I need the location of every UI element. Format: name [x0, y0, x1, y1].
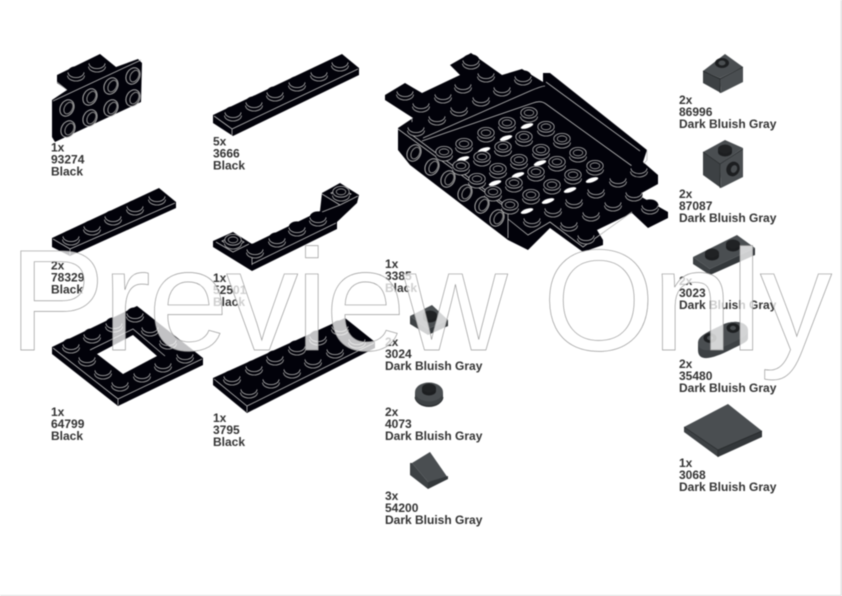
label: 3385: Black [385, 281, 417, 295]
label: 78329: 2x [51, 258, 65, 272]
part: 87087 side stud brick [679, 140, 777, 225]
label: 3024: 2x [385, 335, 399, 349]
label: 3385: 3385 [385, 269, 412, 283]
part: 3795 plate [213, 318, 375, 449]
label: 3795: Black [213, 435, 245, 449]
label: 86996: 86996 [679, 105, 713, 119]
label: 52501: 52501 [213, 283, 247, 297]
label: 52501: 1x [213, 271, 227, 285]
label: 35480: 2x [679, 357, 693, 371]
label: 4073: 4073 [385, 417, 412, 431]
label: 87087: 87087 [679, 199, 713, 213]
part: 52501 inverted slope [213, 183, 359, 309]
label: 3023: 2x [679, 274, 693, 288]
label: 86996: 2x [679, 93, 693, 107]
part: 93274 bracket [51, 54, 143, 178]
part: 78329 plate [51, 188, 176, 296]
label: 3068: 3068 [679, 468, 706, 482]
label: 3795: 1x [213, 411, 227, 425]
part: 64799 frame plate [51, 306, 203, 443]
part: 35480 rounded plate [679, 322, 777, 395]
label: 3024: Dark Bluish Gray [385, 359, 483, 373]
part: 86996 brick [679, 54, 777, 131]
label: 54200: 3x [385, 489, 399, 503]
label: 3385: 1x [385, 257, 399, 271]
floor studs [436, 107, 604, 214]
label: 87087: 2x [679, 187, 693, 201]
label: 52501: Black [213, 295, 245, 309]
label: 3068: 1x [679, 456, 693, 470]
label: 3795: 3795 [213, 423, 240, 437]
label: 64799: Black [51, 429, 83, 443]
label: 3023: 3023 [679, 286, 706, 300]
label: 93274: Black [51, 164, 83, 178]
label: 3666: 3666 [213, 146, 240, 160]
label: 86996: Dark Bluish Gray [679, 117, 777, 131]
side wall studs [404, 142, 507, 229]
part: 54200 slope [385, 452, 483, 527]
label: 35480: Dark Bluish Gray [679, 381, 777, 395]
part: 3023 plate 1x2 [679, 235, 777, 312]
label: 3024: 3024 [385, 347, 412, 361]
floor holes [456, 122, 599, 215]
watermark: Preview Only: Preview Only [9, 220, 832, 381]
label: 3666: 5x [213, 134, 227, 148]
label: 35480: 35480 [679, 369, 713, 383]
label: 54200: 54200 [385, 501, 419, 515]
label: 87087: Dark Bluish Gray [679, 211, 777, 225]
label: 3068: Dark Bluish Gray [679, 480, 777, 494]
part: 3666 plate [213, 54, 359, 172]
label: 4073: Dark Bluish Gray [385, 429, 483, 443]
hull silhouette [385, 53, 668, 252]
label: 78329: 78329 [51, 270, 85, 284]
part: 4073 round plate [385, 382, 483, 443]
part: 3385 boat base [385, 53, 668, 295]
label: 93274: 1x [51, 140, 65, 154]
label: 93274: 93274 [51, 152, 85, 166]
label: 64799: 1x [51, 405, 65, 419]
label: 4073: 2x [385, 405, 399, 419]
label: 3666: Black [213, 158, 245, 172]
label: 64799: 64799 [51, 417, 85, 431]
upper studs [396, 54, 532, 136]
label: 3023: Dark Bluish Gray [679, 298, 777, 312]
label: 78329: Black [51, 282, 83, 296]
lower studs [524, 162, 658, 244]
part: 3024 plate 1x1 [385, 305, 483, 373]
part: 3068 tile [679, 404, 777, 494]
label: 54200: Dark Bluish Gray [385, 513, 483, 527]
